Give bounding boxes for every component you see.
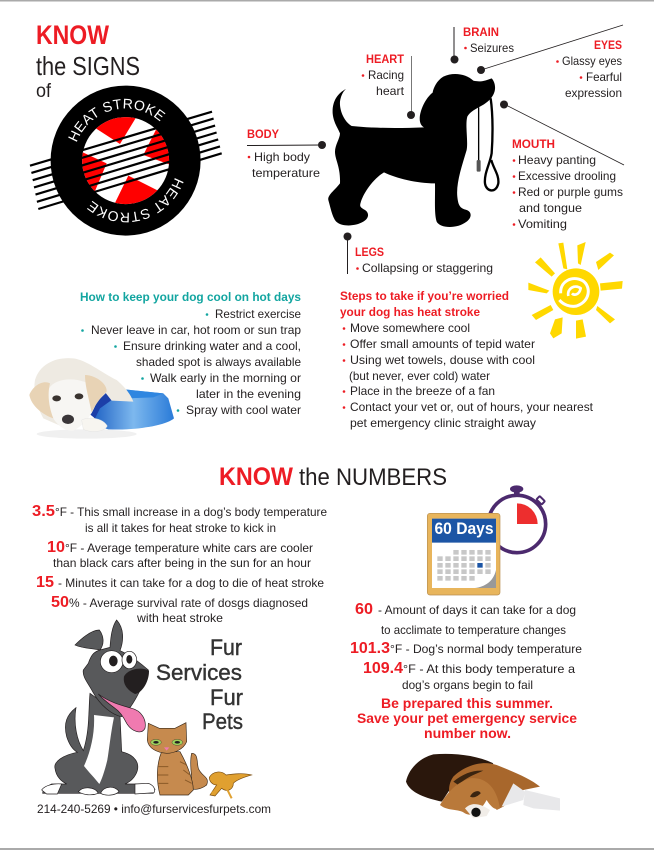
stat: 109.4 F: dog’s organs begin to fail	[402, 678, 533, 692]
heading: know the numbers: KNOW	[219, 463, 293, 491]
icon: cartoon dog	[42, 620, 155, 795]
logo text: fur services fur pets: Fur	[210, 635, 242, 660]
stat: 101.3 F	[350, 640, 582, 657]
label: legs	[344, 232, 493, 275]
label: heart: Racing	[368, 68, 404, 82]
icon: sleeping beagle	[406, 754, 560, 818]
label: body	[247, 127, 326, 180]
stat: 10 F: than black cars after being in the sun for an hour	[53, 556, 311, 570]
label: eyes: Fearful	[586, 70, 622, 84]
label: legs: Collapsing or staggering	[362, 261, 493, 275]
label: mouth: and tongue	[519, 201, 582, 215]
stat: 60 days: - Amount of days it can take for a dog	[378, 603, 576, 617]
label: heart: HEART	[366, 52, 405, 66]
icon: black dog silhouette with leash	[328, 74, 498, 227]
icon: cartoon cat	[147, 723, 207, 795]
stat: 101.3 F: °F - Dog’s normal body temperature	[390, 642, 582, 656]
label: mouth	[500, 100, 624, 231]
title: know the signs of	[36, 20, 140, 102]
label: legs: LEGS	[355, 245, 384, 259]
logo text: fur services fur pets: Services	[156, 660, 242, 685]
label: heart	[362, 52, 415, 119]
list: keep cool tips	[81, 307, 301, 417]
label: heart: heart	[376, 84, 405, 98]
label: body: temperature	[252, 166, 320, 180]
label: body: BODY	[247, 127, 279, 141]
list: keep cool tips: Walk early in the morning or	[150, 371, 301, 385]
panel: steps to take	[340, 289, 594, 430]
title: know the signs of: the SIGNS	[36, 51, 140, 81]
label: brain: BRAIN	[463, 25, 499, 39]
list: steps: (but never, ever cold) water	[349, 369, 490, 383]
label: eyes: expression	[565, 86, 622, 100]
logo text: fur services fur pets	[156, 635, 243, 734]
panel: numbers left	[32, 503, 327, 625]
stat: 109.4 F: 109.4	[363, 660, 403, 677]
list: steps: Move somewhere cool	[350, 321, 470, 335]
label: eyes: EYES	[594, 38, 622, 52]
icon: heat stroke badge: HEAT STROKE	[87, 178, 184, 222]
stat: 50 percent: % - Average survival rate of dosgs diagnosed	[69, 596, 308, 610]
callout: be prepared	[357, 695, 577, 741]
stat: 3.5 F	[32, 503, 327, 535]
list: keep cool tips: later in the evening	[196, 387, 301, 401]
stat: 10 F: °F - Average temperature white cars are cooler	[65, 541, 313, 555]
stat: 10 F	[47, 539, 313, 570]
label: mouth: Excessive drooling	[518, 169, 616, 183]
contact line: 214-240-5269 • info@furservicesfurpets.com	[37, 802, 271, 816]
stat: 10 F: 10	[47, 539, 65, 556]
list: steps: Using wet towels, douse with cool	[350, 353, 535, 367]
list: steps: Place in the breeze of a fan	[350, 384, 495, 398]
label: eyes: Glassy eyes	[562, 54, 622, 68]
stat: 3.5 F: 3.5	[32, 503, 55, 520]
title: know the signs of: KNOW	[36, 20, 109, 50]
list: steps: Contact your vet or, out of hours, your nearest	[350, 400, 594, 414]
list: steps	[343, 321, 594, 430]
stat: 3.5 F: °F - This small increase in a dog’s body temperature	[55, 505, 327, 519]
list: keep cool tips: shaded spot is always available	[136, 355, 301, 369]
icon: heat stroke badge: HEAT STROKE	[68, 98, 166, 142]
list: keep cool tips: Spray with cool water	[186, 403, 301, 417]
list: keep cool tips: Restrict exercise	[215, 307, 301, 321]
stat: 109.4 F	[363, 660, 575, 692]
title: know the signs of: of	[36, 81, 52, 102]
list: steps: pet emergency clinic straight away	[350, 416, 536, 430]
label: eyes	[477, 25, 623, 100]
stat: 50 percent: 50	[51, 594, 69, 611]
callout: be prepared: number now.	[424, 725, 511, 741]
label: mouth: Heavy panting	[518, 153, 596, 167]
stat: 15 minutes: - Minutes it can take for a dog to die of heat stroke	[58, 576, 324, 590]
panel: numbers right	[350, 601, 582, 741]
icon: stopwatch	[488, 485, 546, 553]
label: mouth: MOUTH	[512, 137, 555, 151]
icon: heat stroke badge	[30, 86, 222, 236]
label: mouth: Vomiting	[518, 217, 567, 231]
label: brain	[450, 25, 514, 64]
callout: be prepared: Be prepared this summer.	[381, 695, 553, 711]
logo text: fur services fur pets: Pets	[202, 709, 243, 734]
list: keep cool tips: Ensure drinking water and a cool,	[123, 339, 301, 353]
panel: how to keep your dog cool	[80, 290, 301, 417]
stat: 60 days: to acclimate to temperature changes	[381, 623, 566, 637]
label: brain: Seizures	[470, 41, 514, 55]
stat: 109.4 F: °F - At this body temperature a	[403, 662, 575, 676]
icon: puppy with blue bowl	[29, 358, 174, 439]
icon: sun	[528, 242, 623, 339]
heading: know the numbers	[219, 463, 447, 491]
list: steps: Offer small amounts of tepid water	[350, 337, 535, 351]
heading: steps	[340, 289, 509, 319]
stat: 50 percent: with heat stroke	[136, 611, 223, 625]
label: mouth: Red or purple gums	[518, 185, 623, 199]
heading: know the numbers: the NUMBERS	[299, 464, 447, 491]
heading: steps: Steps to take if you’re worried	[340, 289, 509, 303]
stat: 50 percent	[51, 594, 308, 625]
stat: 101.3 F: 101.3	[350, 640, 390, 657]
icon: 60 days calendar	[427, 513, 500, 595]
stat: 60 days	[355, 601, 576, 637]
stat: 60 days: 60	[355, 601, 373, 618]
heading: keep cool: How to keep your dog cool on hot days	[80, 290, 301, 304]
icon: cartoon lizard	[209, 772, 252, 798]
stat: 3.5 F: is all it takes for heat stroke to kick in	[85, 521, 276, 535]
logo text: fur services fur pets: Fur	[210, 685, 243, 710]
stat: 15 minutes: 15	[36, 574, 54, 591]
label: body: High body	[254, 150, 310, 164]
callout: be prepared: Save your pet emergency service	[357, 710, 577, 726]
heading: steps: your dog has heat stroke	[340, 305, 480, 319]
list: keep cool tips: Never leave in car, hot room or sun trap	[91, 323, 301, 337]
icon: 60 days calendar: 60 Days	[434, 519, 494, 538]
